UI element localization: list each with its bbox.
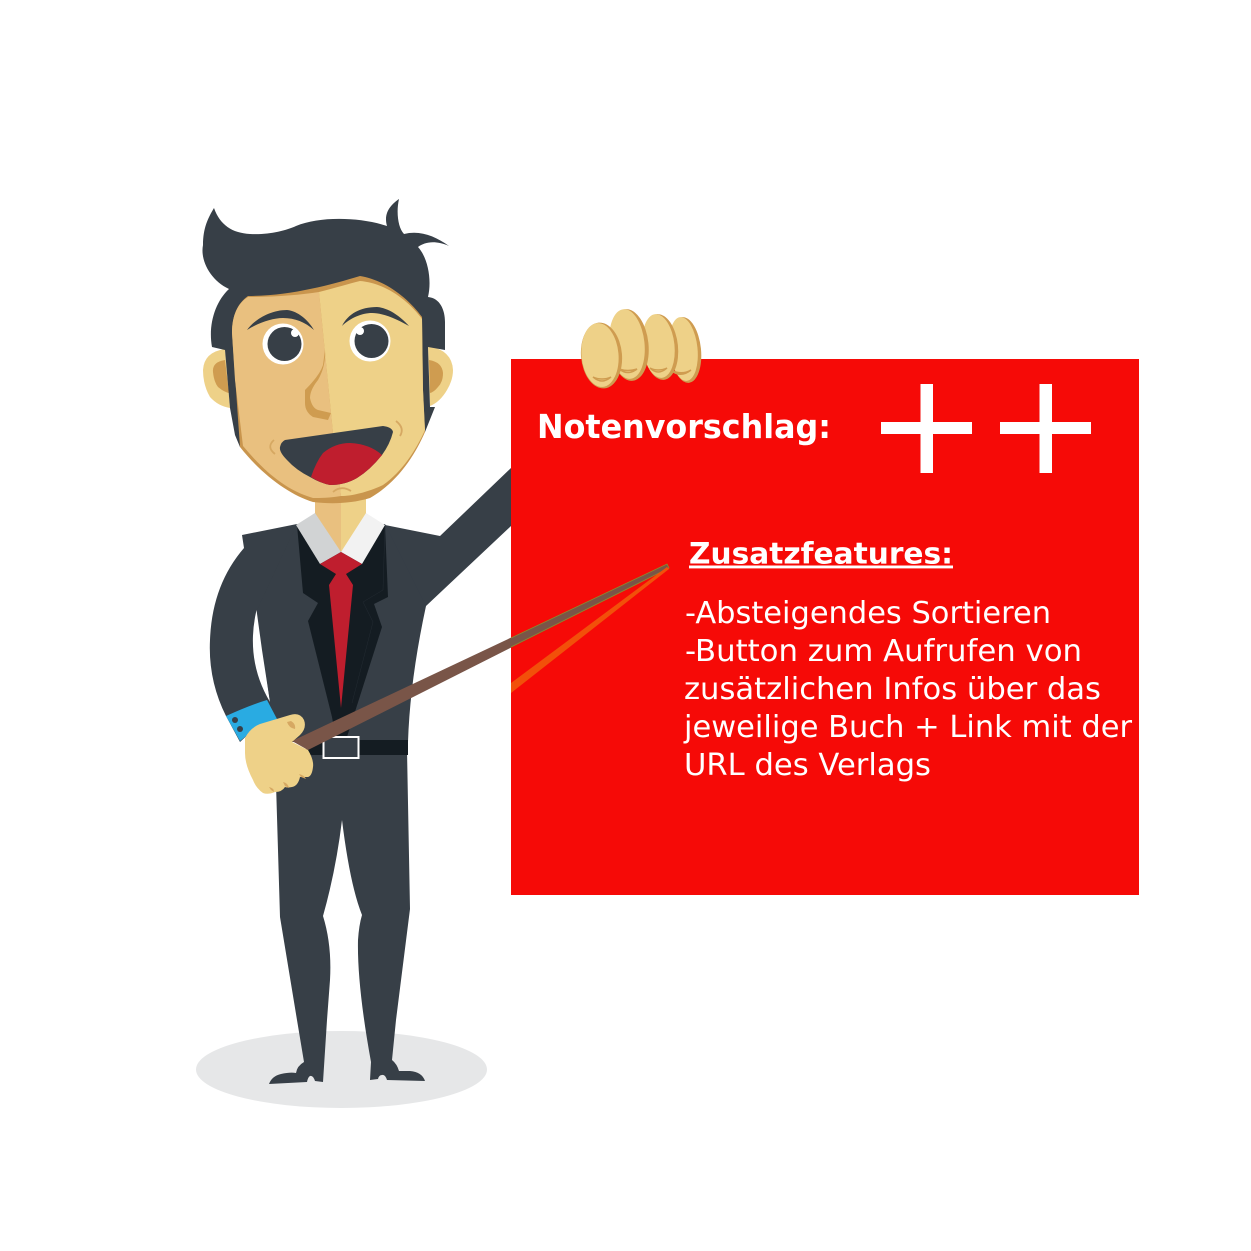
- smile creases: [270, 421, 402, 492]
- features list: zusätzlichen Infos über das: [684, 672, 1101, 707]
- grade plus signs: [881, 384, 1091, 473]
- face left side: [232, 292, 341, 498]
- lapel seam: [352, 525, 385, 703]
- belt: [300, 740, 408, 755]
- cuff: [226, 700, 277, 741]
- neck: [315, 495, 341, 552]
- left eyebrow: [247, 310, 314, 330]
- hair: [202, 199, 449, 447]
- left sleeve: [210, 524, 330, 742]
- jacket: [210, 524, 426, 742]
- features heading: Zusatzfeatures:: [689, 536, 953, 570]
- fingers over the board: [578, 307, 704, 390]
- right eye: [350, 320, 390, 362]
- pointer stick: [292, 564, 669, 750]
- features list: -Button zum Aufrufen von: [685, 634, 1082, 669]
- tongue: [311, 443, 382, 485]
- right ear: [428, 346, 453, 406]
- face shadow: [232, 276, 425, 503]
- belt buckle: [324, 737, 358, 758]
- features list: [683, 596, 1133, 783]
- floor shadow: [196, 1031, 487, 1108]
- sleeve gap: [253, 610, 270, 702]
- pointer glare: [511, 567, 669, 693]
- nose: [305, 350, 331, 420]
- left eye: [262, 324, 304, 364]
- mouth: [280, 426, 393, 485]
- pointer edge highlight: [511, 564, 669, 647]
- head: [202, 199, 453, 503]
- legs and trousers: [269, 750, 425, 1084]
- grade heading: Notenvorschlag:: [537, 407, 831, 446]
- hand: [245, 714, 313, 794]
- features list: jeweilige Buch + Link mit der: [683, 710, 1133, 745]
- right eyebrow: [342, 307, 409, 326]
- features list: URL des Verlags: [684, 748, 931, 783]
- cuff buttons: [232, 717, 243, 732]
- tie: [320, 552, 362, 708]
- left ear: [203, 349, 230, 408]
- features list: -Absteigendes Sortieren: [685, 596, 1051, 631]
- lapels and shirt: [297, 525, 388, 740]
- raised arm: [385, 468, 511, 640]
- panel: red board: [511, 359, 1139, 895]
- face right side: [319, 281, 425, 496]
- jacket body: [257, 524, 426, 742]
- collar: [296, 513, 341, 564]
